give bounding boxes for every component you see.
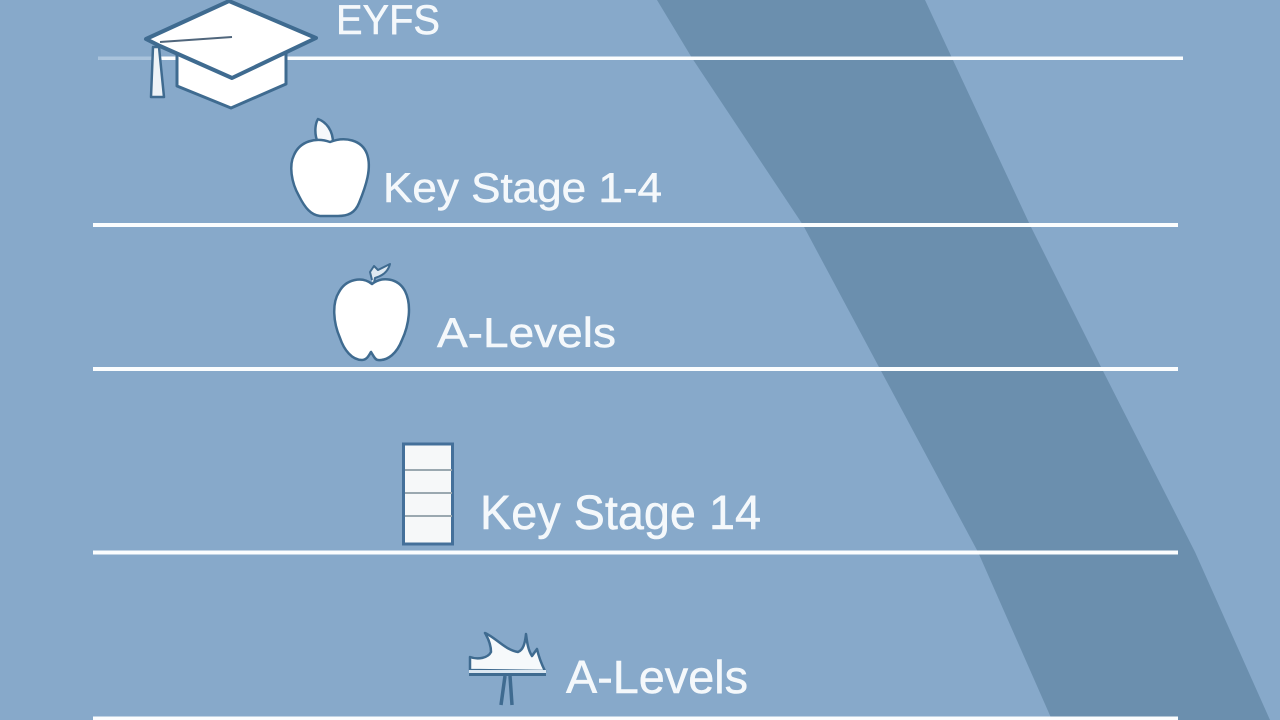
icon: flame on stand — [469, 633, 546, 705]
label: Key Stage 1-4: Key Stage 1-4 — [383, 164, 662, 211]
divider line 3 — [93, 367, 1178, 371]
icon: apple with upright leaf — [291, 119, 369, 216]
label: A-Levels (upper): A-Levels — [437, 309, 616, 356]
divider line 2 — [93, 223, 1178, 227]
divider line 1 — [98, 56, 1183, 60]
icon: apple with side leaf — [334, 264, 409, 360]
diagonal shadow band — [657, 0, 1270, 720]
divider line 5 — [93, 716, 1178, 720]
divider line 4 — [93, 550, 1178, 554]
icon: graduation cap — [146, 1, 316, 108]
label: A-Levels (lower): A-Levels — [566, 651, 748, 703]
icon: stacked books panel — [404, 444, 452, 544]
label: Key Stage 14: Key Stage 14 — [480, 487, 761, 540]
